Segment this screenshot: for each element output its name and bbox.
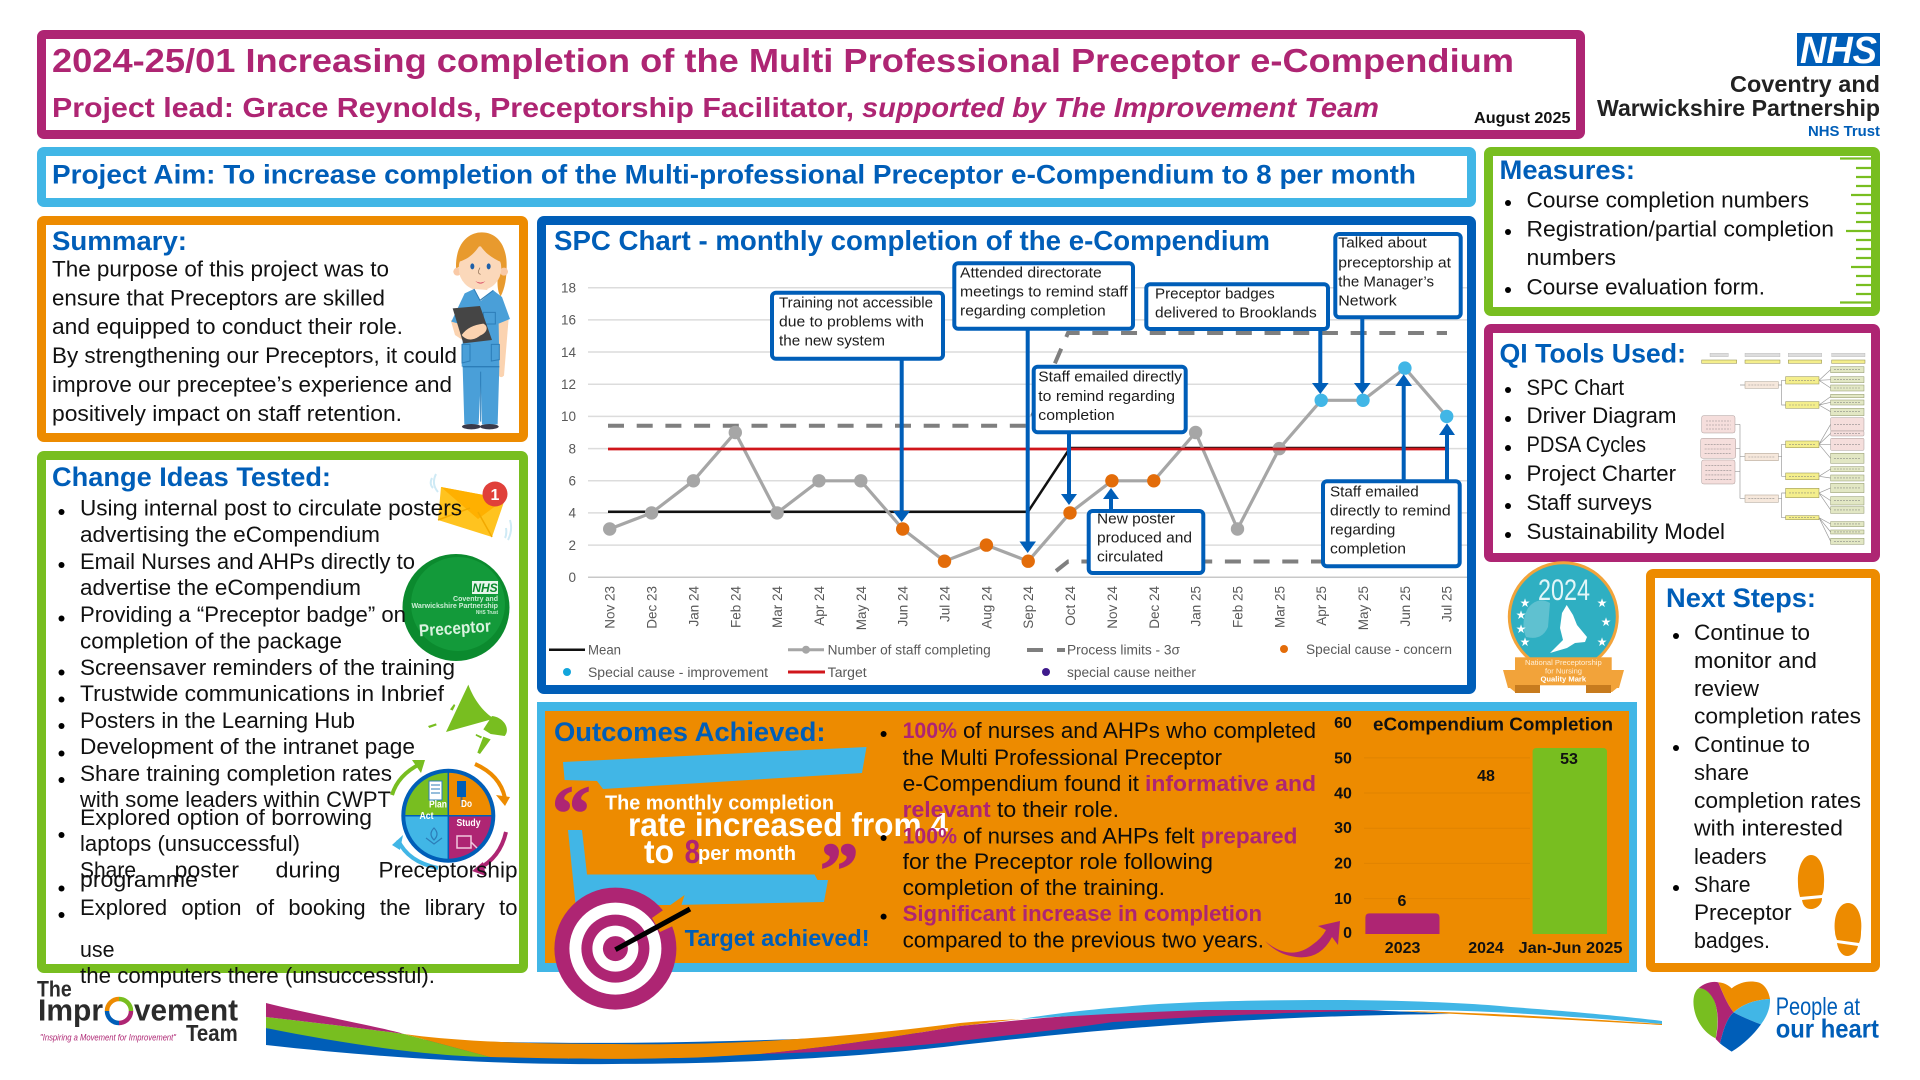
list: change ideas: Screensaver reminders of the training xyxy=(80,655,455,680)
callout: staff emailed directly to remind: directly to remind xyxy=(1330,502,1451,519)
legend: SPC chart: Mean xyxy=(588,642,621,658)
list: change ideas: Providing a “Preceptor badge” on xyxy=(80,602,406,627)
icon: nurse with clipboard xyxy=(451,232,510,429)
list: measures: Registration/partial completion xyxy=(1526,217,1834,242)
chart: SPC line chart: Nov 23 xyxy=(603,586,618,629)
panel: next steps xyxy=(1646,569,1880,972)
logo: NHS Coventry and Warwickshire Partnership: NHS Trust xyxy=(1808,123,1880,140)
list: outcomes: prepared xyxy=(1201,824,1297,848)
icon: PDSA cycle: Do xyxy=(461,799,472,810)
callout: talked about preceptorship: Talked about xyxy=(1338,234,1428,251)
logo: NHS Coventry and Warwickshire Partnership: NHS xyxy=(1800,30,1877,72)
logo: People at our heart: People at xyxy=(1776,993,1860,1021)
bar chart: eCompendium completion: 0 xyxy=(1343,925,1352,942)
list: next steps: completion rates xyxy=(1694,704,1861,728)
icon: National Preceptorship Quality Mark badge: ★ xyxy=(1516,608,1526,622)
list: next steps: completion rates xyxy=(1694,788,1861,813)
chart: driver diagram xyxy=(1701,353,1865,544)
list: change ideas: poster xyxy=(174,858,239,882)
heading: project title: 2024-25/01 Increasing completion of the Multi Professional Preceptor e-Compendium xyxy=(52,42,1514,79)
bar chart: eCompendium completion: 60 xyxy=(1334,715,1352,732)
callout: staff emailed directly to remind: regarding xyxy=(1330,521,1395,538)
chart: SPC line chart: Dec 23 xyxy=(645,586,660,629)
panel: outcomes achieved xyxy=(537,702,1637,972)
panel: measures xyxy=(1484,147,1880,316)
icon: National Preceptorship Quality Mark badge: ★ xyxy=(1520,596,1530,610)
icon: ruler xyxy=(1840,158,1871,302)
chart: SPC line chart: May 25 xyxy=(1356,586,1371,630)
icon: preceptor badge xyxy=(402,554,510,661)
list: measures xyxy=(1505,188,1834,300)
heading: measures: Measures: xyxy=(1500,155,1635,185)
bar chart: eCompendium completion: 2024 xyxy=(1468,940,1504,957)
icon: megaphone xyxy=(428,685,507,754)
chart: SPC line chart: Apr 24 xyxy=(812,586,827,626)
chart: SPC line chart: 2 xyxy=(568,538,576,553)
icon: PDSA cycle xyxy=(392,760,510,876)
bar chart: eCompendium completion: Jan-Jun 2025 xyxy=(1518,940,1623,957)
list: outcomes: e-Compendium found it xyxy=(903,771,1139,796)
icon: National Preceptorship Quality Mark badge: for Nursing xyxy=(1545,666,1582,676)
list: change ideas: Share xyxy=(80,858,136,882)
callout: monthly completion quote: to xyxy=(644,833,674,870)
chart: SPC line chart: Mar 24 xyxy=(770,586,785,628)
panel: summary xyxy=(37,216,528,442)
arrow: staff emailed Jun 25 xyxy=(1395,374,1412,480)
callout: preceptor badges delivered: Preceptor badges xyxy=(1155,285,1275,302)
text: project lead: Project lead: Grace Reynolds, Preceptorship Facilitator, xyxy=(52,92,854,123)
list: change ideas: Email Nurses and AHPs directly to xyxy=(80,549,415,574)
logo: The Improvement Team: vement xyxy=(134,993,238,1028)
text: summary body: positively impact on staff retention. xyxy=(52,401,402,426)
chart: SPC line chart: 4 xyxy=(568,506,576,521)
panel: QI tools used xyxy=(1484,324,1880,562)
chart: SPC line chart: Jul 24 xyxy=(938,586,952,622)
chart: SPC line chart: 6 xyxy=(568,474,576,489)
icon: preceptor badge: Coventry and xyxy=(453,596,498,603)
list: change ideas: Explored option of booking the library to xyxy=(80,895,518,920)
callout: monthly completion quote: The monthly completion xyxy=(605,793,834,815)
decoration: footer swoosh xyxy=(266,1000,1662,1064)
bar chart: eCompendium completion: 48 xyxy=(1477,768,1495,785)
chart: SPC line chart: 18 xyxy=(561,280,576,296)
list: measures: numbers xyxy=(1526,245,1616,270)
arrow: staff emailed Jul 25 xyxy=(1439,423,1455,480)
arrow: preceptor badges xyxy=(1312,331,1329,394)
chart: SPC line chart: Aug 24 xyxy=(979,586,994,629)
list: outcomes: 100% xyxy=(903,824,957,848)
chart: SPC line chart: May 24 xyxy=(854,586,869,630)
legend: SPC chart: Special cause - improvement xyxy=(588,665,768,680)
list: change ideas: Preceptorship xyxy=(378,858,518,882)
chart: SPC line chart: 10 xyxy=(561,409,576,424)
callout: training not accessible: Training not accessible xyxy=(779,294,933,311)
list: change ideas: Share training completion rates xyxy=(80,761,392,786)
callout: monthly completion quote: 8 xyxy=(685,833,700,870)
bar chart: eCompendium completion: 6 xyxy=(1398,893,1407,910)
list: outcomes: for the Preceptor role following xyxy=(903,849,1213,874)
heading: change ideas: Change Ideas Tested: xyxy=(52,462,331,492)
icon: National Preceptorship Quality Mark badge: ★ xyxy=(1597,635,1607,649)
legend: SPC chart: Special cause - concern xyxy=(1306,642,1452,657)
logo: The Improvement Team: Impr xyxy=(38,993,103,1028)
logo: NHS Coventry and Warwickshire Partnership xyxy=(1597,30,1880,140)
list: outcomes: relevant xyxy=(903,797,991,822)
icon: National Preceptorship Quality Mark badge: Quality Mark xyxy=(1540,675,1587,684)
arrow: new poster xyxy=(1103,488,1119,510)
callout: talked about preceptorship: preceptorship at xyxy=(1338,255,1452,272)
icon: preceptor badge: NHS Trust xyxy=(476,610,498,616)
icon: National Preceptorship Quality Mark badge: ★ xyxy=(1520,635,1530,649)
icon: PDSA cycle: Plan xyxy=(429,800,447,810)
legend: SPC chart: Process limits - 3σ xyxy=(1067,642,1181,658)
list: outcomes: of nurses and AHPs felt xyxy=(963,824,1194,848)
text: date: August 2025 xyxy=(1474,110,1571,127)
chart: SPC line chart: Dec 24 xyxy=(1147,586,1162,629)
panel: change ideas tested xyxy=(37,451,528,988)
logo: NHS Coventry and Warwickshire Partnership: Coventry and xyxy=(1730,71,1880,97)
callout: new poster: circulated xyxy=(1097,548,1163,565)
text: summary body: improve our preceptee’s experience and xyxy=(52,372,452,397)
list: next steps: with interested xyxy=(1693,816,1843,840)
bar chart: eCompendium completion: 53 xyxy=(1560,751,1578,768)
callout: staff emailed directly xyxy=(1034,367,1186,432)
list: change ideas: advertise the eCompendium xyxy=(80,575,361,600)
chart: SPC line chart: 8 xyxy=(568,441,576,456)
text: summary body: and equipped to conduct their role. xyxy=(52,314,403,339)
list: next steps: badges. xyxy=(1694,928,1770,953)
callout: monthly completion quote: ” xyxy=(820,827,858,913)
list: outcomes: Significant increase in completion xyxy=(903,901,1262,926)
list: change ideas: completion of the package xyxy=(80,628,342,654)
panel: project aim xyxy=(37,147,1476,207)
callout: training not accessible: due to problems with xyxy=(779,314,924,331)
chart: SPC line chart: Jan 24 xyxy=(686,586,701,627)
callout: new poster: New poster xyxy=(1097,510,1175,527)
bar chart: eCompendium completion: eCompendium Completion xyxy=(1373,715,1613,735)
callout: monthly completion quote: rate increased from 4 xyxy=(628,806,949,843)
legend: SPC chart: Target xyxy=(828,665,867,680)
chart: SPC line chart: Feb 25 xyxy=(1230,586,1246,628)
list: change ideas: laptops (unsuccessful) xyxy=(80,831,300,856)
legend: SPC chart: Number of staff completing xyxy=(828,642,991,658)
callout: new poster xyxy=(1089,510,1203,573)
list: outcomes: 100% xyxy=(903,718,957,743)
callout: attended directorate meetings xyxy=(954,263,1133,329)
icon: PDSA cycle: Act xyxy=(420,811,434,822)
list: next steps: leaders xyxy=(1694,844,1766,869)
list: change ideas: Using internal post to circulate posters xyxy=(80,496,462,520)
arrow: directorate meetings xyxy=(1020,330,1036,553)
chart: SPC line chart: Jan 25 xyxy=(1189,586,1204,627)
list: change ideas: Trustwide communications in Inbrief xyxy=(80,681,445,706)
legend: SPC chart xyxy=(549,642,1452,680)
callout: staff emailed directly: completion xyxy=(1038,407,1115,424)
chart: SPC line chart: 14 xyxy=(561,345,576,360)
icon: National Preceptorship Quality Mark badge: National Preceptorship xyxy=(1525,658,1602,667)
chart: SPC line chart: Oct 24 xyxy=(1063,586,1078,626)
list: next steps: Share xyxy=(1694,872,1750,897)
list: QI tools: Staff surveys xyxy=(1526,490,1652,515)
bar chart: eCompendium completion: 50 xyxy=(1334,750,1352,767)
callout: staff emailed directly to remind: Staff emailed xyxy=(1330,483,1419,500)
chart: SPC line chart: 12 xyxy=(561,377,576,392)
callout: preceptor badges delivered: delivered to Brooklands xyxy=(1155,304,1317,321)
text: target achieved: Target achieved! xyxy=(685,925,870,951)
panel: SPC chart xyxy=(537,216,1476,694)
chart: SPC line chart: Jun 24 xyxy=(896,586,911,627)
bar chart: eCompendium completion: 10 xyxy=(1334,891,1352,908)
list: change ideas: use xyxy=(80,937,114,962)
callout: new poster: produced and xyxy=(1097,529,1192,546)
list: outcomes: completion of the training. xyxy=(903,875,1165,900)
list: outcomes: compared to the previous two years. xyxy=(903,928,1264,953)
callout: staff emailed directly to remind: completion xyxy=(1330,540,1406,557)
bar chart: eCompendium completion: 2023 xyxy=(1385,940,1420,957)
logo: People at our heart xyxy=(1693,981,1879,1052)
callout: talked about preceptorship xyxy=(1335,234,1461,317)
list: outcomes: the Multi Professional Preceptor xyxy=(903,745,1222,770)
chart: SPC line chart xyxy=(561,280,1467,630)
panel: project aim: Project Aim: To increase completion of the Multi-professional Preceptor e-Compendium to 8 per month xyxy=(52,160,1416,190)
icon: notification envelope: 1 xyxy=(491,487,500,504)
list: outcomes: informative and xyxy=(1145,771,1316,796)
chart: SPC line chart: Mar 25 xyxy=(1272,586,1287,628)
heading: QI tools: QI Tools Used: xyxy=(1500,338,1686,368)
list: change ideas: with some leaders within CWPT xyxy=(79,787,391,812)
list: next steps: Preceptor xyxy=(1694,900,1792,925)
callout: monthly completion quote: per month xyxy=(698,843,796,865)
icon: preceptor badge: NHS xyxy=(472,581,498,595)
list: outcomes xyxy=(881,718,1316,953)
logo: The Improvement Team: "Inspiring a Movement for Improvement" xyxy=(40,1033,177,1043)
list: next steps: review xyxy=(1694,676,1759,701)
chart: SPC line chart: Nov 24 xyxy=(1105,586,1120,629)
chart: SPC line chart: Feb 24 xyxy=(728,586,743,628)
list: measures: Course completion numbers xyxy=(1526,188,1809,213)
list: change ideas: programme xyxy=(80,867,198,892)
chart: SPC line chart: Jun 25 xyxy=(1398,586,1413,627)
icon: footprints xyxy=(1798,855,1861,956)
chart: SPC line chart: Jul 25 xyxy=(1440,586,1455,622)
text: summary body xyxy=(52,256,457,426)
arrow: training issue xyxy=(893,360,910,522)
chart: SPC line chart: Apr 25 xyxy=(1314,586,1329,626)
logo: NHS Coventry and Warwickshire Partnership: Warwickshire Partnership xyxy=(1597,95,1880,121)
chart: SPC line chart: 0 xyxy=(568,570,576,585)
icon: notification envelope xyxy=(431,474,511,540)
callout: monthly completion quote xyxy=(552,747,949,913)
callout: training not accessible xyxy=(772,293,943,359)
list: QI tools: Driver Diagram xyxy=(1526,403,1676,428)
icon: National Preceptorship Quality Mark badge: ★ xyxy=(1597,596,1607,610)
icon: National Preceptorship Quality Mark badge: ★ xyxy=(1601,615,1611,629)
arrow: manager's network xyxy=(1354,319,1371,394)
list: next steps: monitor and xyxy=(1694,648,1817,673)
icon: preceptor badge: Warwickshire Partnership xyxy=(412,603,498,610)
list: change ideas: during xyxy=(276,858,340,882)
list: measures: Course evaluation form. xyxy=(1526,274,1765,300)
list: QI tools: Project Charter xyxy=(1526,461,1676,486)
callout: monthly completion quote: “ xyxy=(552,770,590,856)
list: change ideas: the computers there (unsuccessful). xyxy=(80,963,435,988)
arrow: purple curved arrow to chart xyxy=(1265,921,1340,957)
list: outcomes: of nurses and AHPs who completed xyxy=(963,718,1316,743)
list: change ideas: Development of the intranet page xyxy=(80,734,415,759)
callout: training not accessible: the new system xyxy=(779,333,885,350)
bar chart: eCompendium completion: 20 xyxy=(1334,856,1352,873)
logo: People at our heart: our heart xyxy=(1776,1014,1879,1044)
callout: talked about preceptorship: the Manager’s xyxy=(1338,274,1434,291)
text: summary body: By strengthening our Preceptors, it could xyxy=(52,343,457,368)
icon: National Preceptorship Quality Mark badge: ★ xyxy=(1516,622,1526,636)
list: next steps: Continue to xyxy=(1694,732,1810,757)
legend: SPC chart: special cause neither xyxy=(1067,665,1197,680)
bar chart: eCompendium completion xyxy=(1334,715,1623,957)
callout: attended directorate meetings: meetings to remind staff xyxy=(960,284,1129,301)
list: change ideas: Explored option of borrowing xyxy=(80,805,372,830)
list: QI tools: Sustainability Model xyxy=(1526,519,1725,544)
bar chart: eCompendium completion: 40 xyxy=(1334,786,1352,803)
logo: The Improvement Team: The xyxy=(37,977,72,1002)
list: change ideas: Posters in the Learning Hub xyxy=(80,708,355,733)
list: QI tools: SPC Chart xyxy=(1526,375,1624,400)
list: outcomes: to their role. xyxy=(997,797,1119,822)
panel: title xyxy=(37,30,1585,139)
heading: outcomes: Outcomes Achieved: xyxy=(554,717,826,747)
list: change ideas: advertising the eCompendium xyxy=(80,522,380,547)
icon: preceptor badge: Preceptor xyxy=(418,616,492,640)
list: QI tools xyxy=(1505,375,1725,544)
callout: attended directorate meetings: Attended directorate xyxy=(960,264,1102,281)
logo: The Improvement Team: Team xyxy=(186,1020,238,1046)
callout: attended directorate meetings: regarding completion xyxy=(960,303,1106,320)
callout: staff emailed directly to remind xyxy=(1323,481,1460,566)
list: next steps xyxy=(1673,620,1861,953)
text: supporting team: supported by The Improvement Team xyxy=(862,92,1379,123)
callout: talked about preceptorship: Network xyxy=(1338,293,1397,310)
chart: SPC line chart: 16 xyxy=(561,313,576,328)
list: next steps: Continue to xyxy=(1694,620,1810,645)
bar chart: eCompendium completion: 30 xyxy=(1334,820,1352,837)
list: next steps: share xyxy=(1694,760,1749,785)
heading: SPC chart: SPC Chart - monthly completion of the e-Compendium xyxy=(554,225,1270,256)
text: summary body: The purpose of this project was to xyxy=(52,256,389,282)
callout: staff emailed directly: to remind regarding xyxy=(1038,388,1175,405)
callout: staff emailed directly: Staff emailed directly xyxy=(1038,369,1183,386)
list: QI tools: PDSA Cycles xyxy=(1526,432,1646,457)
list: change ideas xyxy=(58,496,518,988)
icon: PDSA cycle: Study xyxy=(456,818,481,829)
icon: target with arrow xyxy=(554,888,690,1010)
chart: SPC line chart: Sep 24 xyxy=(1021,586,1036,629)
icon: National Preceptorship Quality Mark badge: 2024 xyxy=(1538,574,1590,607)
heading: next steps: Next Steps: xyxy=(1666,583,1816,613)
icon: National Preceptorship Quality Mark badge xyxy=(1503,561,1624,693)
logo: The Improvement Team xyxy=(37,977,238,1046)
arrow: staff emailed Oct 24 xyxy=(1061,434,1077,505)
text: summary body: ensure that Preceptors are skilled xyxy=(52,286,385,310)
heading: summary: Summary: xyxy=(52,226,187,256)
callout: preceptor badges delivered xyxy=(1146,284,1328,329)
